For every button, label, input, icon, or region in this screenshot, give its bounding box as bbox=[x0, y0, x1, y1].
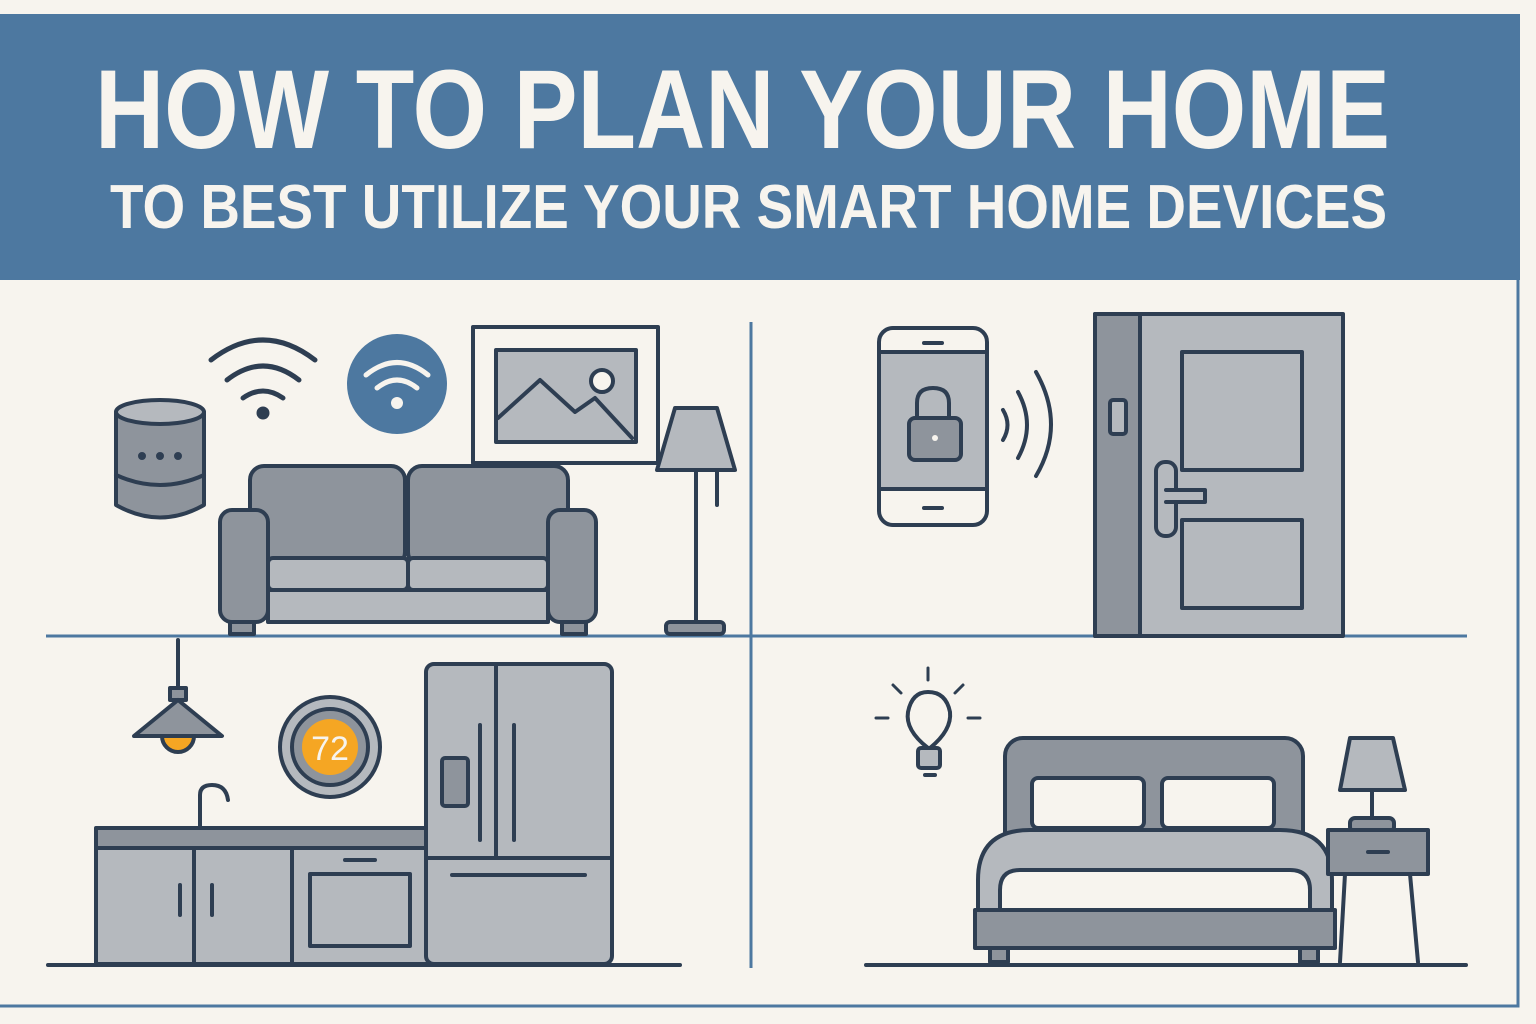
icon: wifi circle bbox=[347, 334, 447, 434]
icon: fridge bbox=[426, 664, 612, 964]
icon: door bbox=[1095, 314, 1343, 636]
icon: bed bbox=[975, 738, 1335, 962]
panel: bedroom bbox=[866, 668, 1466, 965]
icon: signal waves bbox=[1003, 372, 1051, 476]
panel: kitchen bbox=[48, 640, 680, 965]
panel: living room bbox=[116, 327, 735, 634]
frame border bbox=[0, 280, 1518, 1006]
icon: pendant lamp bbox=[134, 640, 222, 752]
icon: sink faucet bbox=[200, 785, 228, 828]
icon: picture frame bbox=[473, 327, 658, 463]
header banner bbox=[0, 14, 1520, 280]
icon: thermostat: 72 bbox=[311, 730, 349, 768]
icon: cabinets bbox=[96, 828, 428, 964]
icon: phone with lock bbox=[879, 328, 987, 525]
icon: light bulb bbox=[876, 668, 980, 775]
icon: smart speaker bbox=[116, 400, 204, 518]
icon: nightstand with lamp bbox=[1328, 738, 1428, 962]
icon: thermostat bbox=[280, 697, 380, 797]
panel: entry door bbox=[879, 314, 1343, 636]
icon: sofa bbox=[220, 466, 596, 634]
icon: wifi bbox=[211, 340, 315, 417]
icon: floor lamp bbox=[657, 408, 735, 634]
subtitle: TO BEST UTILIZE YOUR SMART HOME DEVICES bbox=[110, 173, 1387, 242]
